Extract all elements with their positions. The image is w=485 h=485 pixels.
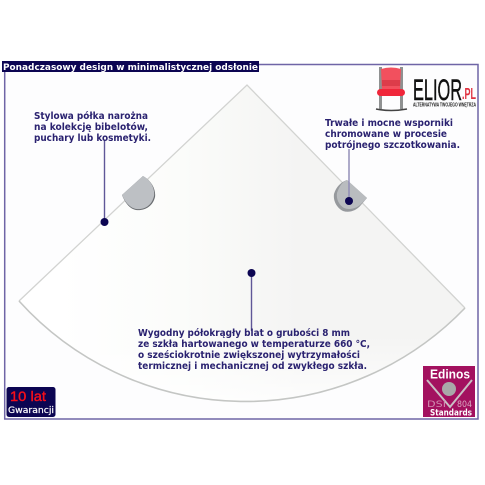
callout: center: o sześciokrotnie zwiększonej wytrzymałości [138, 350, 360, 361]
callout: center: termicznej i mechanicznej od zwykłego szkła. [138, 361, 367, 372]
callout: center: Wygodny półokrągły blat o grubości 8 mm [138, 328, 350, 339]
icon: red chair [376, 67, 407, 110]
left bracket [122, 176, 155, 210]
frame [5, 64, 478, 419]
badge: Edinos standards: Edinos [430, 366, 470, 382]
callout: right: chromowane w procesie [325, 129, 447, 140]
badge: 10 lat warranty: 10 lat [10, 388, 46, 404]
badge: Edinos standards: DSI [427, 400, 446, 410]
title bar: Ponadczasowy design w minimalistycznej odsłonie [3, 62, 258, 73]
corner shelf [19, 85, 465, 401]
callout: right: Trwałe i mocne wsporniki [325, 118, 453, 129]
callout: left: puchary lub kosmetyki. [34, 133, 151, 144]
badge: Edinos standards [423, 366, 475, 418]
callout: left: na kolekcję bibelotów, [34, 122, 148, 133]
badge: Edinos standards: 804 [457, 400, 472, 410]
logo: Elior.pl [376, 67, 476, 110]
right bracket [334, 180, 367, 212]
callout: left [34, 111, 151, 226]
callout: left: Stylowa półka narożna [34, 111, 148, 122]
badge: 10 lat warranty: Gwarancji [8, 406, 54, 416]
callout: right: potrójnego szczotkowania. [325, 140, 460, 151]
badge: 10 lat warranty [6, 387, 56, 417]
callout: center: ze szkła hartowanego w temperaturze 660 °C, [138, 339, 370, 350]
callout: right [325, 118, 460, 205]
badge: Edinos standards: Standards [430, 408, 472, 418]
callout: center [138, 269, 373, 372]
